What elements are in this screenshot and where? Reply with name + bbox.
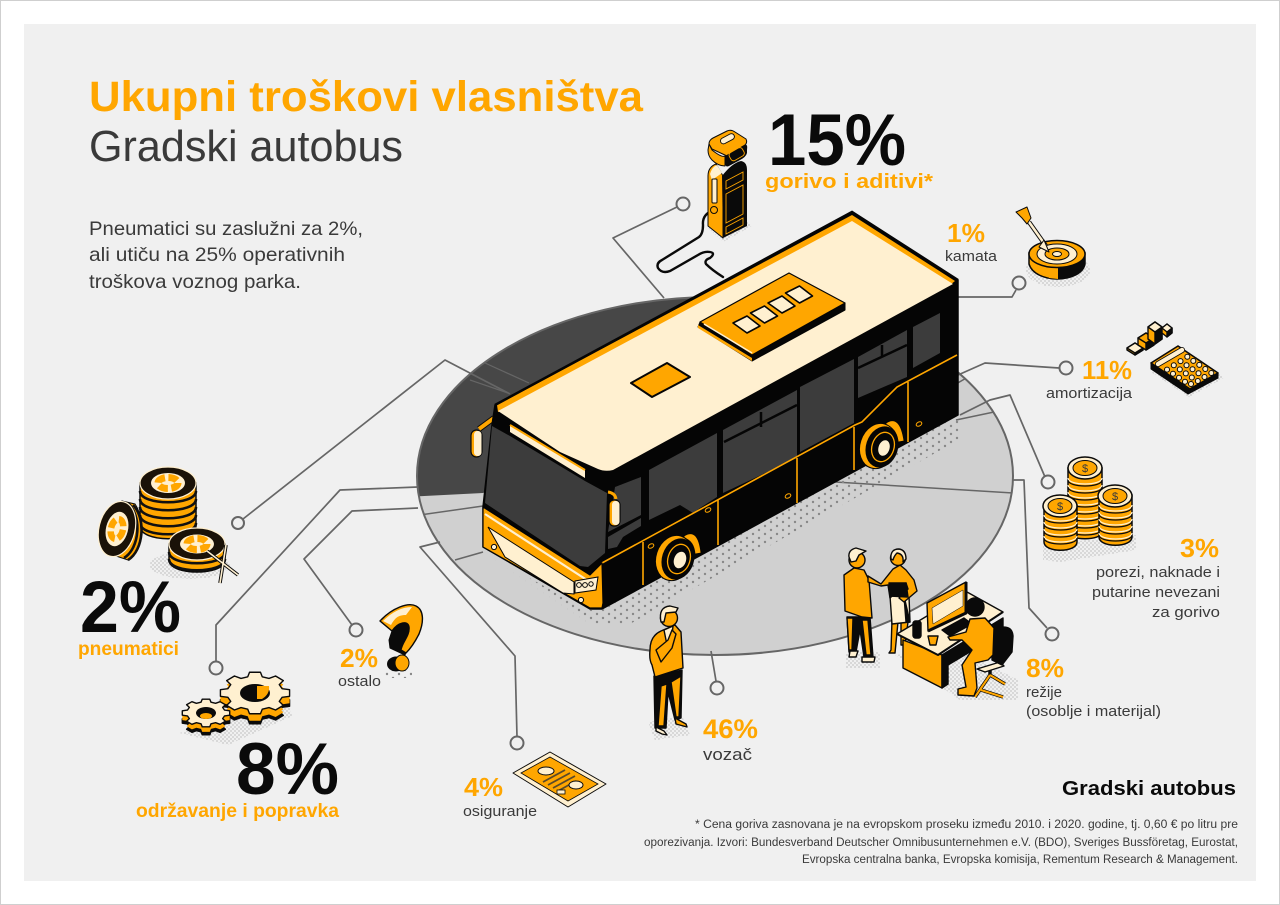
left mirror (471, 418, 494, 457)
label: other 2%: 2% (340, 643, 378, 673)
small tire stack (169, 528, 225, 572)
icon: calculator and bars (1127, 322, 1224, 397)
label: depreciation 11% (1046, 355, 1133, 402)
label: taxes 3%: za gorivo (1152, 605, 1220, 621)
tire wrench (207, 545, 238, 583)
label: tires 2%: pneumatici (78, 639, 179, 660)
label: fuel 15%: gorivo i aditivi* (765, 171, 933, 193)
label: insurance 4%: osiguranje (463, 803, 537, 820)
subtitle: Gradski autobus (89, 122, 403, 171)
label: maintenance 8%: 8% (236, 729, 339, 810)
bus illustration (471, 212, 958, 609)
footnote and sources: * Cena goriva zasnovana je na evropskom proseku između 2010. i 2020. godine, tj. 0,60 € po litru pre (695, 819, 1238, 831)
door handles (647, 421, 923, 549)
coin stack: left: $ (1057, 501, 1063, 513)
office mug and bottle (913, 621, 938, 645)
intro text: troškova voznog parka. (89, 271, 301, 293)
label: driver 46%: vozač (703, 745, 753, 764)
orange body lines (602, 355, 957, 585)
label: insurance 4%: 4% (464, 772, 503, 802)
label: interest 1% (945, 218, 998, 265)
mini bar chart (1127, 322, 1172, 355)
icon: driver figure (648, 606, 690, 740)
office man (844, 548, 875, 662)
intro text (89, 218, 363, 293)
bus body (483, 212, 958, 609)
label: interest 1%: kamata (945, 248, 998, 265)
front bumper (483, 507, 603, 608)
label: other 2% (338, 643, 381, 690)
label: fuel 15%: 15% (768, 100, 906, 181)
office worker on chair (948, 598, 1013, 697)
windshield (485, 426, 607, 567)
intro text: Pneumatici su zaslužni za 2%, (89, 218, 363, 240)
leader lines with circles (210, 198, 1072, 750)
roof air conditioning unit (698, 273, 845, 361)
footnote and sources (644, 819, 1238, 866)
label: overhead 8%: (osoblje i materijal) (1026, 704, 1161, 720)
office desk (897, 592, 1003, 688)
label: maintenance 8% (136, 729, 339, 822)
label: taxes 3%: porezi, naknade i (1096, 565, 1220, 581)
icon: target with arrow (1016, 207, 1090, 287)
tire stack (140, 467, 196, 539)
intro text: ali utiču na 25% operativnih (89, 244, 345, 266)
label: overhead 8% (1026, 653, 1161, 720)
side windows (608, 313, 940, 549)
footer heading: Gradski autobus (1062, 777, 1236, 800)
label: overhead 8%: 8% (1026, 653, 1064, 683)
label: taxes 3% (1092, 533, 1220, 621)
label: driver 46% (703, 714, 758, 764)
footnote and sources: oporezivanja. Izvori: Bundesverband Deutscher Omnibusunternehmen e.V. (BDO), Sveriges Bussföretag, Eurostat, (644, 837, 1238, 849)
pie chart ellipse (400, 285, 1013, 655)
label: taxes 3%: putarine nevezani (1092, 585, 1220, 601)
icon: office scene (844, 548, 1018, 700)
roof hatch (631, 363, 690, 397)
coin stack: right: $ (1112, 491, 1118, 503)
icon: tires (93, 467, 238, 583)
title: Ukupni troškovi vlasništva (89, 73, 644, 121)
icon: fuel pump (658, 130, 752, 277)
icon: insurance certificate (513, 752, 606, 807)
gear: small (182, 699, 230, 735)
standing tire (93, 497, 142, 561)
label: tires 2%: 2% (80, 567, 181, 648)
gear: large (220, 672, 290, 724)
front roof light strip (510, 425, 585, 478)
icon: coin stacks (1043, 457, 1136, 562)
icon: question mark (380, 605, 422, 678)
rear wheel (854, 419, 904, 473)
label: overhead 8%: režije (1026, 685, 1062, 701)
office woman (868, 549, 917, 653)
front wheel (650, 531, 701, 585)
dotted shadow under bus (487, 415, 962, 624)
label: depreciation 11%: 11% (1082, 355, 1132, 385)
office monitor (927, 582, 972, 636)
label: taxes 3%: 3% (1180, 533, 1219, 563)
label: other 2%: ostalo (338, 673, 381, 690)
label: insurance 4% (463, 772, 537, 820)
label: interest 1%: 1% (947, 218, 985, 248)
coin stack: tall: $ (1082, 463, 1088, 475)
icon: gears (180, 672, 292, 745)
label: maintenance 8%: održavanje i popravka (136, 801, 339, 822)
label: depreciation 11%: amortizacija (1046, 385, 1133, 402)
label: driver 46%: 46% (703, 714, 758, 744)
footnote and sources: Evropska centralna banka, Evropska komisija, Rementum Research & Management. (802, 854, 1238, 866)
bus roof (495, 212, 958, 471)
right mirror (608, 492, 620, 526)
